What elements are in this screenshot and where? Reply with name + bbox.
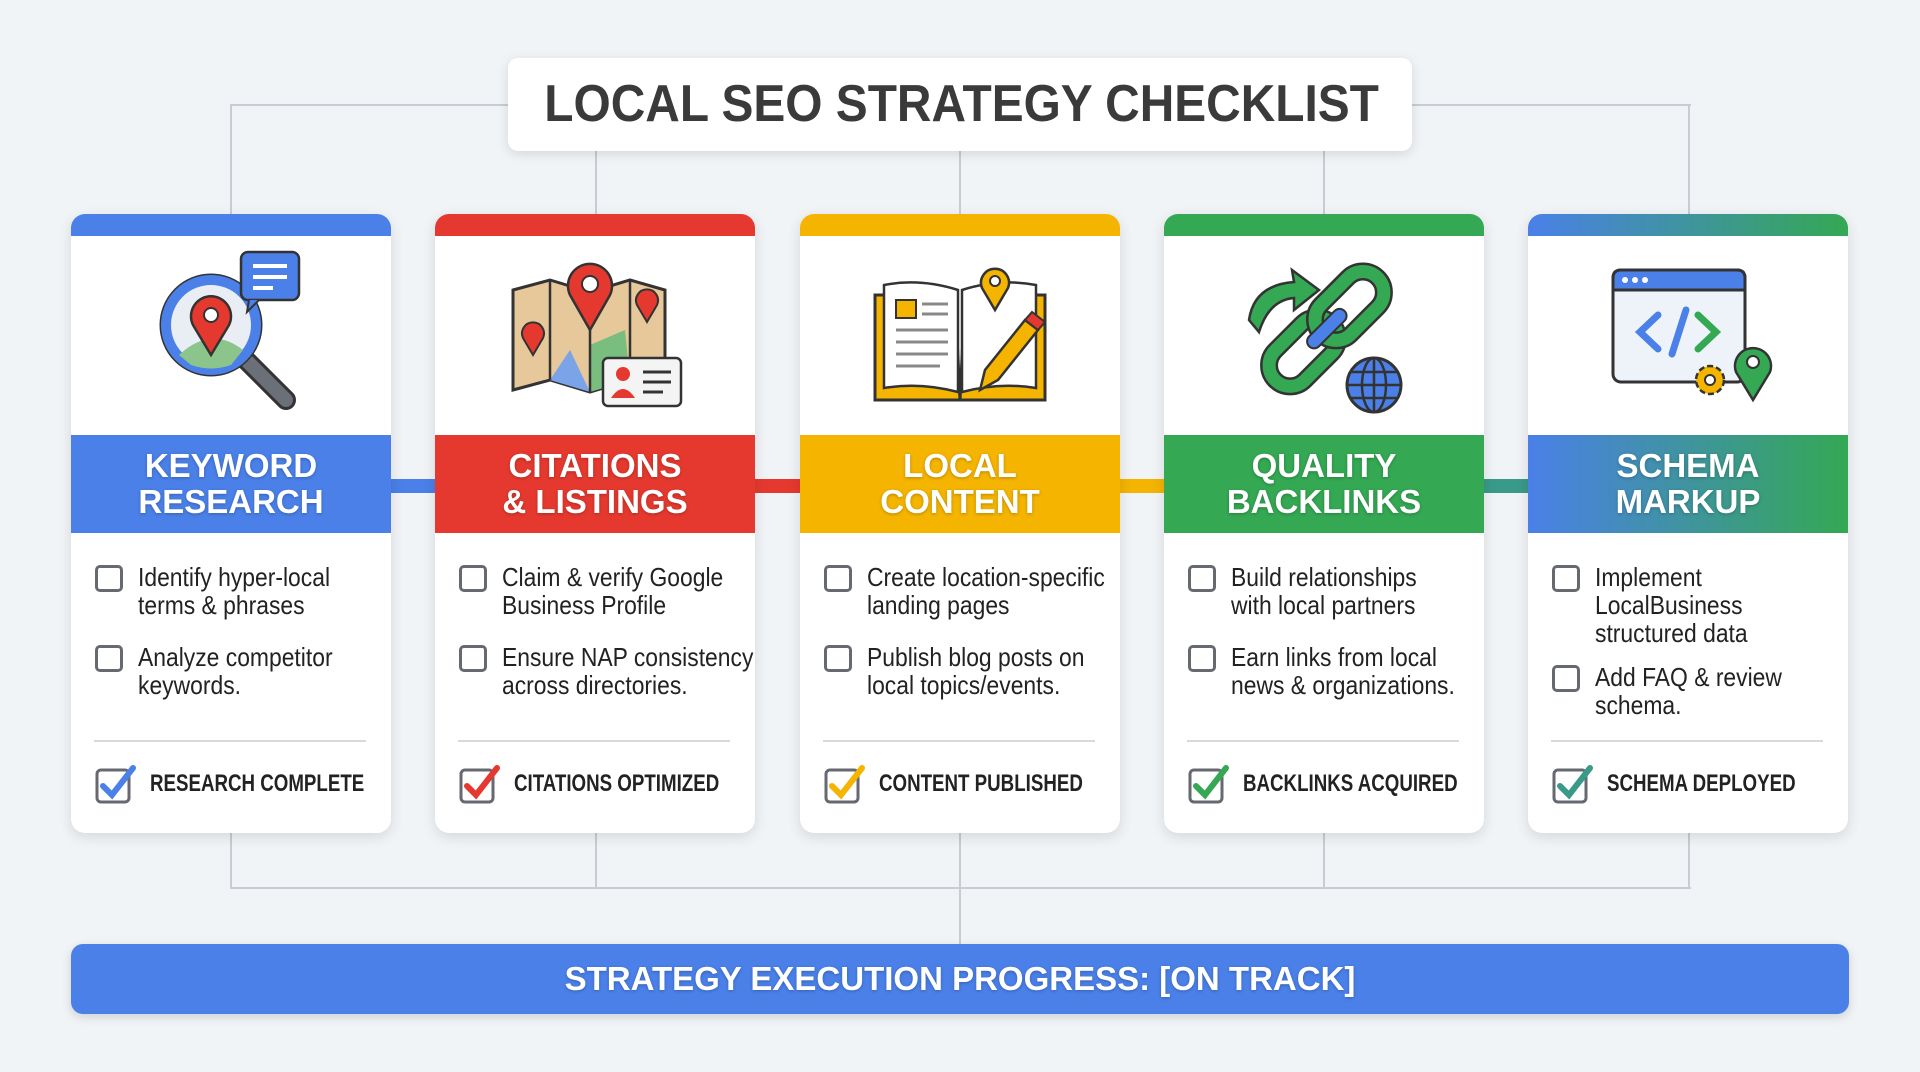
title: LOCAL SEO STRATEGY CHECKLIST	[544, 75, 1379, 133]
connector lines	[124, 104, 1772, 944]
header connectors	[391, 479, 1528, 493]
checklist item: local topics/events.	[867, 670, 1060, 700]
checklist item: Business Profile	[502, 590, 666, 620]
footer status	[1552, 765, 1796, 804]
checklist item: schema.	[1595, 690, 1681, 720]
icon: open book with pencil and pin	[874, 268, 1046, 402]
checklist item: LocalBusiness	[1595, 590, 1743, 620]
header: RESEARCH	[138, 483, 324, 520]
checklist item	[459, 642, 754, 700]
checklist item	[1552, 562, 1748, 648]
icon: magnifier with pin	[160, 250, 300, 410]
checklist item	[824, 642, 1085, 700]
header	[71, 435, 391, 533]
checklist item: Analyze competitor	[138, 642, 333, 672]
footer status: SCHEMA DEPLOYED	[1607, 770, 1796, 797]
footer status: BACKLINKS ACQUIRED	[1243, 770, 1458, 797]
footer status: CONTENT PUBLISHED	[879, 770, 1083, 797]
checklist item: Add FAQ & review	[1595, 662, 1782, 692]
header	[800, 435, 1120, 533]
panel: local content	[800, 214, 1120, 833]
footer status	[460, 765, 719, 804]
progress bar: STRATEGY EXECUTION PROGRESS: [ON TRACK]	[565, 960, 1355, 997]
checklist item	[1188, 642, 1455, 700]
icon: code window with gear and pin	[1612, 268, 1772, 402]
checklist item: Claim & verify Google	[502, 562, 723, 592]
checklist item	[1552, 662, 1782, 720]
panel: schema markup	[1528, 214, 1848, 833]
panel: keyword research	[71, 214, 391, 833]
header: CONTENT	[880, 483, 1040, 520]
checklist item: Ensure NAP consistency	[502, 642, 753, 672]
checklist item: Publish blog posts on	[867, 642, 1085, 672]
checklist item: structured data	[1595, 618, 1748, 648]
checklist item: landing pages	[867, 590, 1009, 620]
checklist item: Create location-specific	[867, 562, 1105, 592]
header	[1528, 435, 1848, 533]
checklist item: across directories.	[502, 670, 688, 700]
footer status	[1188, 765, 1458, 804]
footer status	[96, 765, 364, 804]
checklist item: Identify hyper-local	[138, 562, 330, 592]
header: BACKLINKS	[1227, 483, 1421, 520]
panel: citations	[435, 214, 755, 833]
footer status	[824, 765, 1083, 804]
progress bar	[71, 944, 1849, 1014]
header	[1164, 435, 1484, 533]
title	[508, 58, 1412, 151]
header: CITATIONS	[509, 447, 681, 484]
checklist item: keywords.	[138, 670, 241, 700]
checklist item	[824, 562, 1105, 620]
checklist item: terms & phrases	[138, 590, 305, 620]
header: QUALITY	[1252, 447, 1396, 484]
header: SCHEMA	[1616, 447, 1760, 484]
checklist item: with local partners	[1231, 590, 1415, 620]
header: MARKUP	[1616, 483, 1760, 520]
checklist item: Earn links from local	[1231, 642, 1437, 672]
checklist item	[459, 562, 723, 620]
header	[435, 435, 755, 533]
header: KEYWORD	[145, 447, 317, 484]
panel: quality backlinks	[1164, 214, 1484, 833]
icon: map with pins and id card	[512, 262, 682, 408]
checklist item: news & organizations.	[1231, 670, 1455, 700]
header: & LISTINGS	[502, 483, 688, 520]
icon: chain links with globe	[1248, 262, 1402, 414]
checklist item: Implement	[1595, 562, 1702, 592]
checklist item	[95, 562, 330, 620]
checklist item	[95, 642, 333, 700]
footer status: RESEARCH COMPLETE	[150, 770, 364, 797]
footer status: CITATIONS OPTIMIZED	[514, 770, 719, 797]
header: LOCAL	[903, 447, 1017, 484]
checklist item: Build relationships	[1231, 562, 1417, 592]
checklist item	[1188, 562, 1417, 620]
